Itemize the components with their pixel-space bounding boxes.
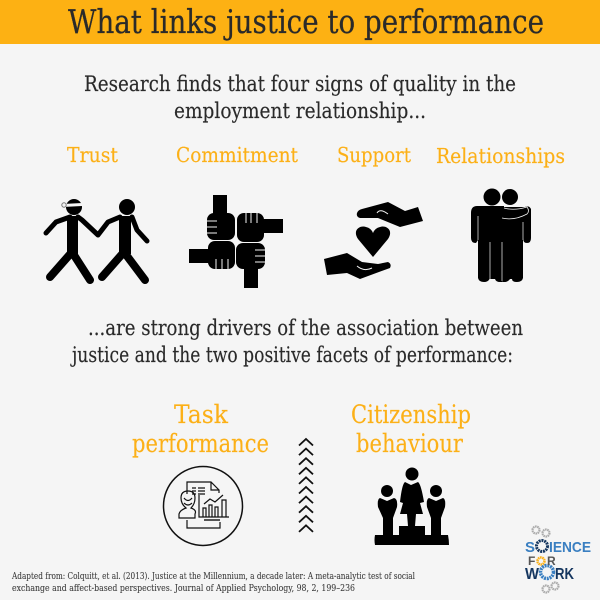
arrow: upward chevrons [299, 439, 313, 532]
label: Task performance [132, 400, 269, 459]
logo: Science for Work: W [525, 566, 540, 583]
middle text: justice and the two positive facets of performance: [70, 343, 513, 367]
label: Commitment: Commitment [176, 143, 299, 167]
icon: hands holding a heart [324, 202, 423, 279]
icon: four interlocked hands [189, 195, 283, 288]
label: Support: Support [337, 143, 412, 167]
intro text: employment relationship... [174, 99, 426, 123]
label: Trust: Trust [67, 143, 119, 167]
logo: Science for Work: RK [555, 566, 574, 583]
label: Citizenship behaviour [351, 400, 471, 459]
logo: Science for Work: IENCE [549, 539, 591, 556]
label: Task performance: performance [132, 429, 269, 459]
icon: two people embracing [471, 188, 531, 282]
label: Citizenship behaviour: Citizenship [351, 400, 471, 430]
label: Relationships: Relationships [436, 144, 565, 168]
icon: blindfolded person led by another [46, 199, 147, 280]
logo: Science for Work: F [528, 554, 535, 568]
label: Citizenship behaviour: behaviour [356, 429, 464, 459]
icon: three people on a podium [374, 468, 449, 545]
icon: task performance report in circle [164, 466, 242, 546]
middle text: ...are strong drivers of the association between [88, 316, 523, 340]
source citation: exchange and affect-based perspectives. Journal of Applied Psychology, 98, 2, 199–236 [12, 584, 355, 594]
logo: Science for Work [525, 526, 591, 592]
intro text [84, 72, 516, 123]
logo: Science for Work: S [525, 539, 535, 556]
logo: Science for Work: R [547, 554, 556, 568]
label: Task performance: Task [174, 400, 228, 430]
intro text: Research finds that four signs of quality in the [84, 72, 516, 96]
source citation: Adapted from: Colquitt, et al. (2013). Justice at the Millennium, a decade later: A meta-analytic test of social [11, 571, 415, 582]
middle text [70, 316, 523, 367]
source citation [11, 571, 415, 594]
